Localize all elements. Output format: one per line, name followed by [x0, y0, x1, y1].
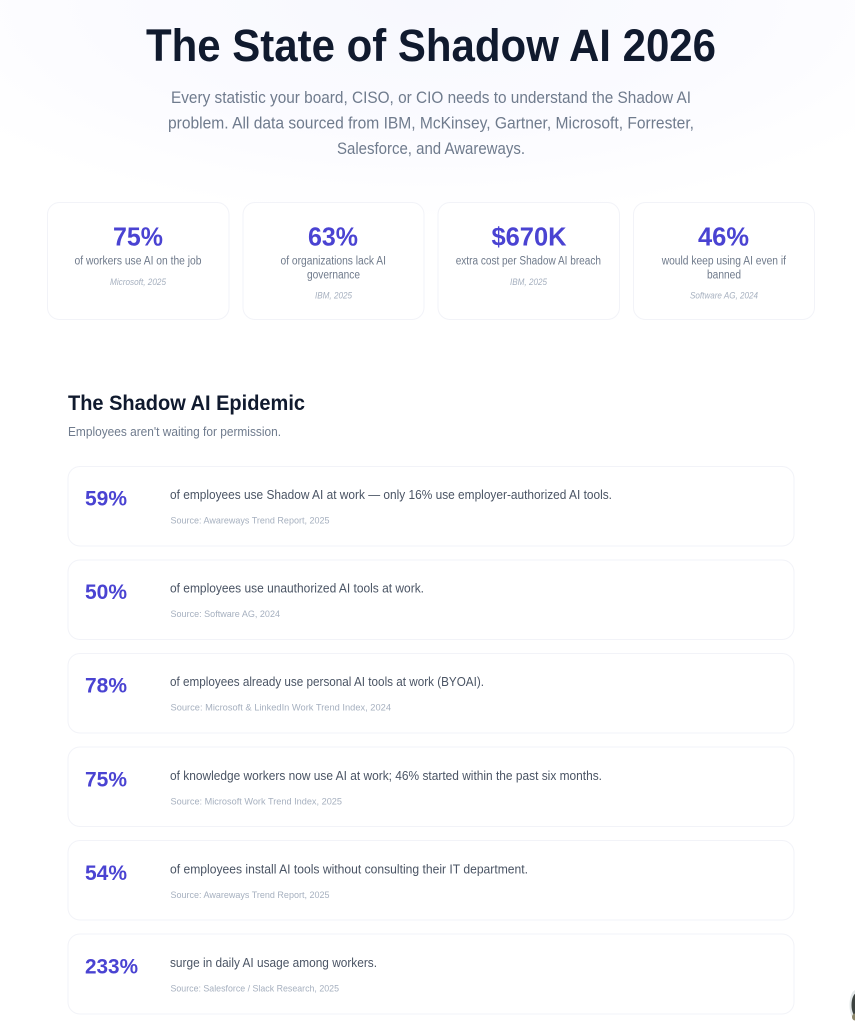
subtitle	[168, 89, 694, 158]
panel: stat row 75%	[68, 747, 794, 826]
panel: stat card 46%: Software AG, 2024	[690, 290, 758, 300]
panel: stat card 63%: governance	[307, 270, 360, 282]
panel: stat row 233%: 233%	[85, 956, 138, 978]
panel: stat card 75%: of workers use AI on the job	[74, 256, 202, 268]
panel: stat row 75%: 75%	[85, 768, 127, 791]
heading: The Shadow AI Epidemic: The Shadow AI Epidemic	[68, 392, 305, 415]
panel: stat row 59%: 59%	[85, 488, 127, 510]
panel: stat row 75%: of knowledge workers now use AI at work; 46% started within the past six months.	[170, 769, 602, 783]
panel: stat card 46%: banned	[707, 270, 741, 282]
panel: stat card 46%	[634, 202, 814, 320]
panel: stat card $670K: IBM, 2025	[510, 277, 548, 287]
panel: stat card 75%: Microsoft, 2025	[110, 277, 167, 287]
panel: stat row 233%: surge in daily AI usage among workers.	[170, 956, 377, 970]
icon: avatar chat widget edge	[850, 990, 855, 1020]
panel: stat card 63%: 63%	[308, 222, 358, 252]
panel: stat row 233%	[68, 934, 794, 1014]
panel: stat card 63%: IBM, 2025	[315, 290, 353, 300]
panel: stat row 59%	[68, 466, 794, 546]
panel: stat row 78%	[68, 654, 794, 733]
panel: stat card 63%	[243, 202, 424, 320]
panel: stat card $670K: extra cost per Shadow AI breach	[456, 256, 601, 268]
panel: stat row 50%: 50%	[85, 581, 127, 604]
panel: stat row 59%: of employees use Shadow AI at work — only 16% use employer-authorized AI tools.	[170, 488, 612, 502]
panel: stat card 63%: of organizations lack AI	[280, 256, 386, 268]
panel: stat row 233%: Source: Salesforce / Slack Research, 2025	[170, 984, 339, 994]
panel: stat row 78%: of employees already use personal AI tools at work (BYOAI).	[170, 675, 484, 689]
panel: stat card 46%: 46%	[698, 222, 749, 252]
section subtitle: Employees aren't waiting for permission.	[68, 425, 281, 439]
panel: stat row 54%: Source: Awareways Trend Report, 2025	[170, 890, 330, 901]
panel: stat card $670K	[438, 202, 620, 320]
panel: stat row 75%: Source: Microsoft Work Trend Index, 2025	[170, 796, 342, 807]
panel: stat row 54%: 54%	[85, 862, 127, 885]
panel: stat row 54%: of employees install AI tools without consulting their IT department.	[170, 862, 528, 876]
subtitle: Salesforce, and Awareways.	[337, 140, 525, 158]
panel: stat row 50%	[68, 560, 794, 640]
panel: stat card 75%	[48, 202, 229, 320]
panel: stat row 54%	[68, 840, 794, 920]
panel: stat row 50%: Source: Software AG, 2024	[170, 609, 280, 620]
panel: stat row 59%: Source: Awareways Trend Report, 2025	[170, 516, 330, 526]
panel: stat card $670K: $670K	[492, 222, 567, 252]
subtitle: problem. All data sourced from IBM, McKinsey, Gartner, Microsoft, Forrester,	[168, 114, 694, 132]
title: The State of Shadow AI 2026	[146, 20, 716, 71]
panel: stat row 78%: 78%	[85, 675, 127, 698]
subtitle: Every statistic your board, CISO, or CIO needs to understand the Shadow AI	[171, 89, 691, 107]
panel: stat row 78%: Source: Microsoft & LinkedIn Work Trend Index, 2024	[170, 703, 391, 714]
panel: stat card 75%: 75%	[113, 222, 163, 252]
panel: stat card 46%: would keep using AI even if	[661, 256, 787, 268]
panel: stat row 50%: of employees use unauthorized AI tools at work.	[170, 582, 424, 596]
